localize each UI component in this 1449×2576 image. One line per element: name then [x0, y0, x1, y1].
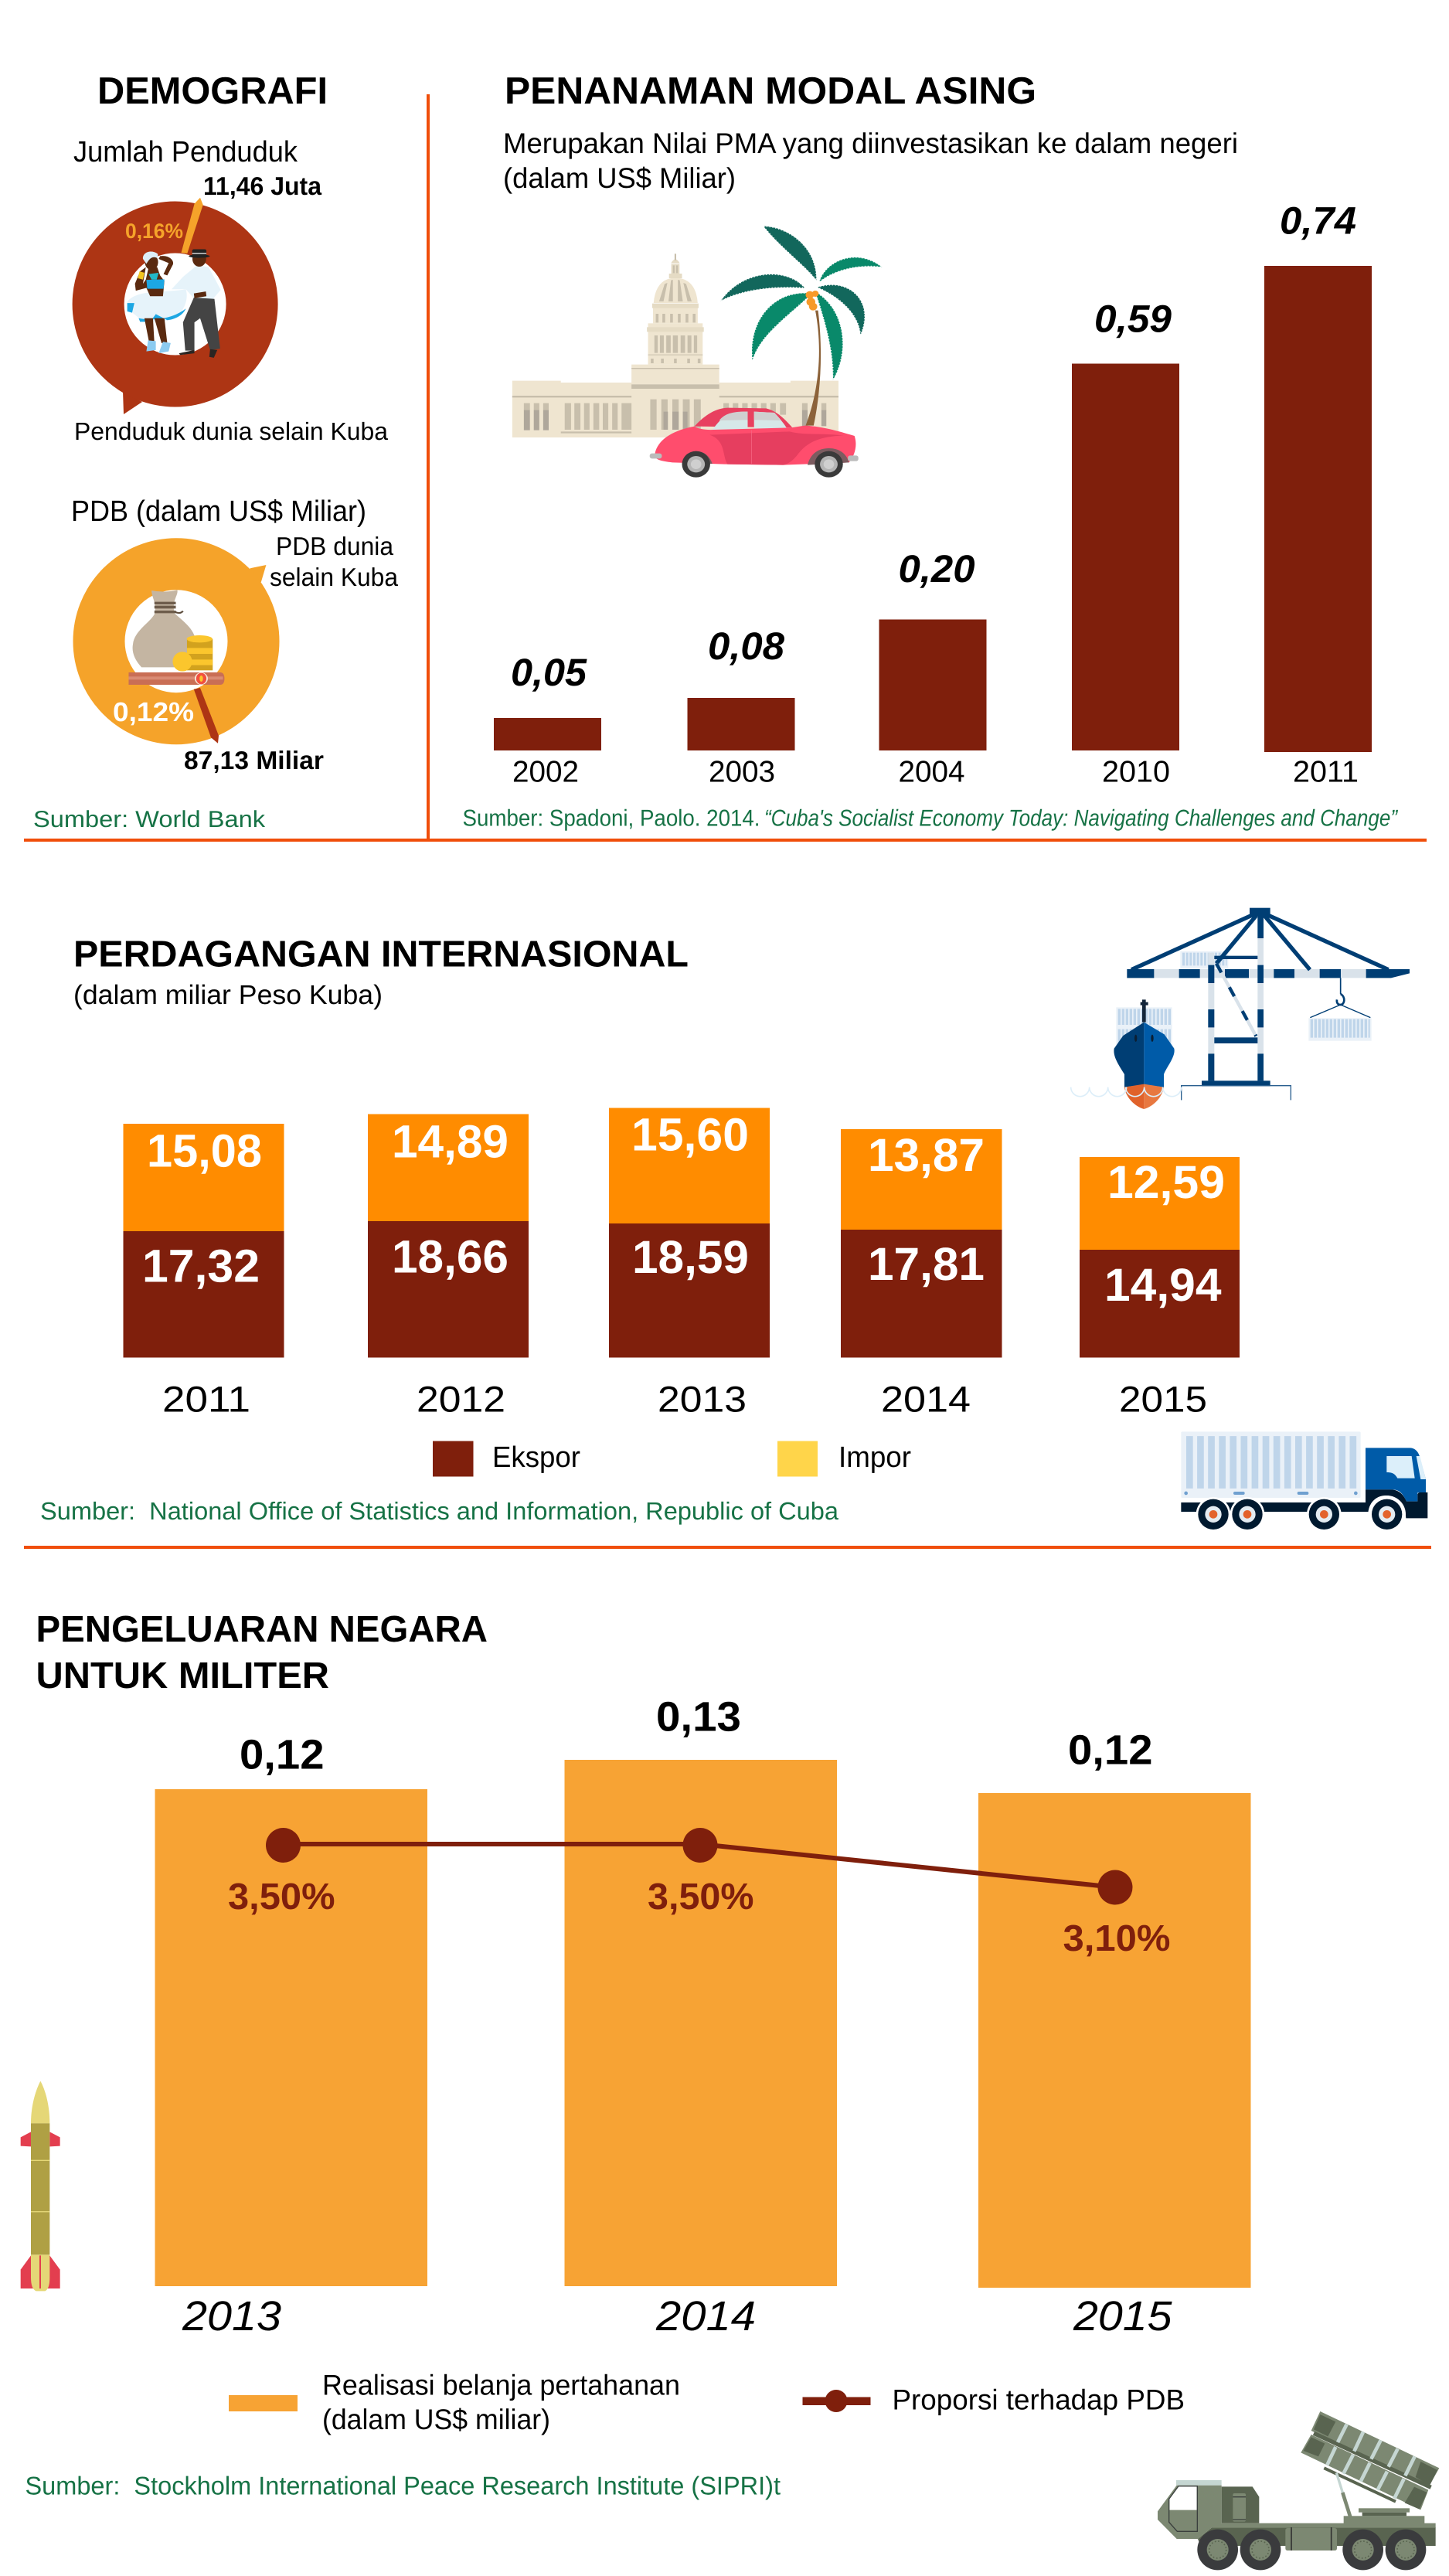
bar 2011: 17,32: [142, 1240, 260, 1292]
bar 2011: 0,74: [1280, 199, 1356, 243]
bar 2004: 2004: [898, 756, 964, 788]
bar 2011: 2011: [162, 1379, 250, 1419]
bar 2015: [978, 1727, 1250, 2339]
heading: perdagangan internasional: PERDAGANGAN INTERNASIONAL: [73, 934, 689, 975]
bar 2015: 12,59: [1107, 1156, 1225, 1208]
bar 2004: [879, 547, 986, 788]
bar 2012: 2012: [417, 1379, 505, 1419]
bar 2012: 18,66: [392, 1230, 509, 1283]
icon: crane and ship: [1071, 908, 1410, 1109]
source: spadoni: Sumber: Spadoni, Paolo. 2014.: [462, 805, 760, 832]
value: 87,13 miliar: 87,13 Miliar: [184, 746, 324, 774]
source: world bank: Sumber: World Bank: [33, 807, 266, 832]
value: 0,12%: 0,12%: [113, 697, 194, 727]
bar chart: fdi: [494, 199, 1372, 788]
heading: pengeluaran negara untuk militer: [36, 1609, 488, 1696]
label: pdb: PDB (dalam US$ Miliar): [71, 495, 366, 528]
heading: pengeluaran negara untuk militer: UNTUK MILITER: [36, 1656, 329, 1696]
stacked bar chart: trade: [124, 1108, 1240, 1419]
panel: demografi: [33, 70, 399, 832]
heading: demografi: DEMOGRAFI: [97, 70, 328, 112]
bar 2003: 2003: [709, 756, 775, 788]
bar 2015: 14,94: [1104, 1259, 1222, 1311]
bar 2014: [841, 1129, 1002, 1419]
bar 2014: 13,87: [868, 1129, 985, 1181]
legend: trade: Ekspor: [492, 1441, 580, 1474]
bar 2003: [688, 624, 794, 788]
bar 2013: 2013: [658, 1379, 747, 1419]
wheels: [1197, 2530, 1426, 2570]
value: 11,46 juta: 11,46 Juta: [203, 172, 322, 200]
line chart: share of gdp: [228, 1828, 1170, 1959]
bar 2010: 2010: [1102, 756, 1170, 788]
label: pdb dunia: PDB dunia: [276, 532, 394, 560]
bar 2015: 2015: [1073, 2293, 1173, 2339]
source: spadoni: [462, 805, 1399, 832]
subheading: Merupakan Nilai PMA yang diinvestasikan ke dalam negeri: [503, 128, 1238, 159]
bar 2002: 2002: [512, 756, 579, 788]
bar 2011: [124, 1124, 284, 1419]
bar 2010: [1072, 297, 1179, 788]
bar 2012: [368, 1114, 529, 1419]
bar chart: military spending: [155, 1694, 1250, 2339]
donut chart: gdp: [99, 564, 266, 744]
bar 2010: 0,59: [1094, 297, 1172, 340]
legend: trade: Impor: [838, 1441, 911, 1474]
capitol building: [512, 254, 838, 437]
car: [650, 408, 859, 478]
bar 2012: 14,89: [392, 1116, 509, 1167]
bar 2002: 0,05: [511, 651, 587, 694]
launcher pods: [1301, 2411, 1439, 2517]
bar 2004: 0,20: [898, 547, 975, 590]
subheading: [503, 128, 1238, 194]
palm tree: [720, 226, 882, 426]
icon: money bag and cigar: [128, 590, 224, 685]
legend: military: [229, 2370, 1185, 2435]
bar 2015: 2015: [1119, 1379, 1207, 1419]
crane: [1127, 908, 1410, 1100]
source: sipri: Sumber: Stockholm International Peace Research Institute (SIPRI)t: [25, 2472, 781, 2499]
line chart: share of gdp: 3,50%: [228, 1877, 335, 1918]
legend: military: (dalam US$ miliar): [322, 2404, 550, 2435]
label: jumlah penduduk: Jumlah Penduduk: [73, 136, 298, 168]
line chart: share of gdp: 3,50%: [648, 1877, 754, 1918]
label: penduduk dunia: Penduduk dunia selain Kuba: [74, 417, 388, 445]
panel: perdagangan internasional: [40, 908, 1427, 1533]
panel: pengeluaran militer: [21, 1609, 1439, 2570]
donut chart: population: [98, 198, 252, 414]
bar 2014: [564, 1694, 837, 2339]
bar 2015: [1080, 1156, 1240, 1419]
line chart: share of gdp: 3,10%: [1063, 1918, 1170, 1959]
bar 2011: [1264, 199, 1372, 788]
bar 2014: 2014: [881, 1379, 971, 1419]
label: pdb dunia: selain Kuba: [270, 563, 399, 591]
bar 2014: 17,81: [868, 1238, 985, 1290]
bar 2013: [609, 1108, 770, 1419]
bar 2013: [155, 1731, 427, 2339]
icon: dancers: [128, 249, 221, 358]
icon: missile: [21, 2081, 60, 2291]
bar 2011: 2011: [1293, 756, 1359, 788]
illustration: capitol, palm and car: [512, 226, 882, 478]
bar 2013: 18,59: [632, 1231, 749, 1283]
panel: penanaman modal asing: [462, 70, 1399, 832]
bar 2015: 0,12: [1068, 1727, 1153, 1773]
legend: trade: [433, 1441, 911, 1476]
bar 2013: 15,60: [631, 1108, 749, 1161]
bar 2013: 2013: [182, 2293, 281, 2339]
bar 2014: 2014: [655, 2293, 756, 2339]
subheading: peso: (dalam miliar Peso Kuba): [73, 980, 383, 1010]
source: national office: Sumber: National Office of Statistics and Information, Republic of Cuba: [40, 1497, 838, 1525]
bar 2002: [494, 651, 601, 788]
heading: penanaman modal asing: PENANAMAN MODAL ASING: [505, 70, 1036, 112]
bar 2011: 15,08: [147, 1125, 262, 1176]
value: 0,16%: 0,16%: [125, 219, 183, 243]
bar 2013: 0,12: [240, 1731, 325, 1778]
bar 2014: 0,13: [656, 1694, 741, 1741]
bar 2003: 0,08: [708, 624, 784, 668]
label: pdb dunia: [270, 532, 399, 591]
icon: rocket launcher truck: [1158, 2411, 1439, 2570]
legend: military: Realisasi belanja pertahanan: [322, 2370, 680, 2401]
legend: military: Proporsi terhadap PDB: [892, 2384, 1185, 2416]
truck body: [1158, 2480, 1436, 2550]
ship: [1071, 999, 1182, 1109]
icon: truck: [1181, 1431, 1427, 1533]
heading: pengeluaran negara untuk militer: PENGELUARAN NEGARA: [36, 1609, 488, 1650]
subheading: (dalam US$ Miliar): [503, 162, 736, 194]
